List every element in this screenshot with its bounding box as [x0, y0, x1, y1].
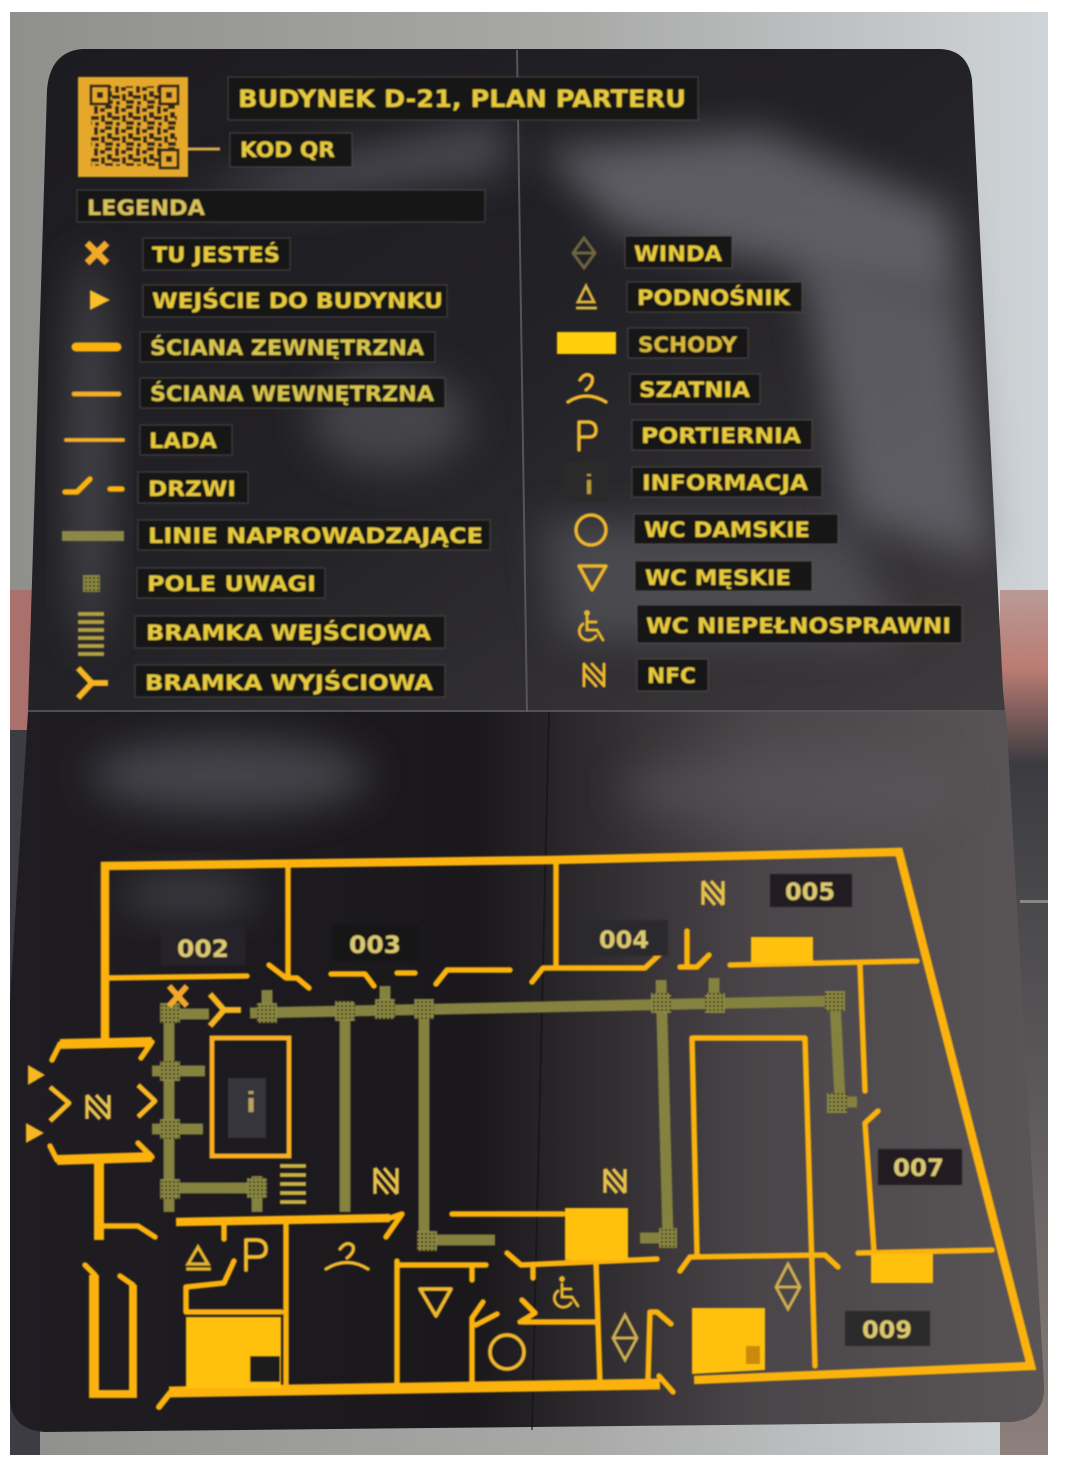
icon: building entrance — [90, 290, 110, 310]
room label 005 — [770, 874, 852, 907]
label: szatnia — [630, 374, 760, 404]
icon: porter's desk — [579, 422, 596, 450]
room label 003: 003 — [349, 931, 401, 959]
label: schody — [628, 328, 748, 358]
label: tu jesteś: TU JESTEŚ — [152, 242, 280, 267]
label: winda: WINDA — [634, 242, 723, 266]
label: informacja: INFORMACJA — [642, 471, 809, 495]
icon: stairs — [557, 332, 616, 354]
icon: men's toilet — [579, 566, 606, 590]
icon: attention field — [83, 575, 100, 592]
label: lada — [140, 425, 232, 455]
icon: wheelchair — [554, 1278, 578, 1307]
label: wc męskie: WC MĘSKIE — [645, 566, 791, 590]
icon: women's toilet — [576, 515, 606, 545]
label: wc niepełnosprawni — [637, 605, 962, 643]
QR leader line — [188, 148, 220, 150]
room label 003 — [333, 925, 419, 961]
icon: platform lift — [576, 286, 597, 308]
label: ściana wewnętrzna: ŚCIANA WEWNĘTRZNA — [150, 381, 435, 406]
room label 002: 002 — [177, 935, 229, 963]
legend heading — [77, 190, 485, 222]
label: linie naprowadzające — [138, 520, 490, 550]
stairs — [186, 937, 933, 1388]
room label 007: 007 — [893, 1154, 944, 1182]
label: wc męskie — [635, 561, 812, 591]
label: portiernia: PORTIERNIA — [641, 424, 802, 448]
label: pole uwagi — [137, 568, 325, 598]
icon: porter P — [246, 1240, 266, 1270]
QR code — [78, 77, 188, 177]
panel: legend right column — [557, 236, 962, 691]
QR label: KOD QR — [240, 138, 335, 162]
inner walls — [105, 860, 992, 1392]
room label 007 — [878, 1149, 962, 1185]
label: drzwi — [138, 472, 248, 503]
icon: exit gate — [78, 668, 108, 698]
room label 009 — [845, 1311, 930, 1346]
icon: accessible toilet — [579, 612, 603, 640]
icon: counter — [66, 438, 123, 442]
label: podnośnik: PODNOŚNIK — [637, 285, 791, 310]
room label 009: 009 — [862, 1316, 912, 1344]
label: nfc: NFC — [647, 664, 696, 688]
room label 002 — [161, 927, 245, 965]
icon: elevators — [613, 1264, 800, 1360]
plate: upper legend section — [28, 49, 1005, 712]
icon: men's toilet — [420, 1289, 451, 1316]
icon: outer wall — [76, 342, 117, 352]
outer walls — [105, 852, 1031, 1380]
label: winda — [625, 236, 732, 268]
floor plan — [26, 852, 1031, 1407]
QR label — [230, 133, 352, 167]
panel: legend left column — [62, 238, 490, 698]
label: wc niepełnosprawni: WC NIEPEŁNOSPRAWNI — [646, 614, 951, 638]
entrance arrows — [26, 1065, 155, 1143]
icon: inner wall — [74, 392, 119, 396]
icon: nfc — [584, 664, 604, 686]
exit gate — [210, 994, 241, 1026]
label: wejście: WEJŚCIE DO BUDYNKU — [152, 288, 443, 313]
icon: guide lines — [62, 531, 124, 541]
label: wc damskie — [634, 514, 838, 544]
guide lines — [152, 978, 857, 1251]
attention fields — [160, 991, 847, 1251]
icon: elevator — [573, 238, 595, 268]
legend heading: LEGENDA — [87, 196, 206, 220]
icon: cloakroom — [568, 375, 606, 402]
label: bramka wejściowa: BRAMKA WEJŚCIOWA — [146, 620, 432, 645]
you are here marker — [169, 986, 187, 1006]
icon: door — [65, 479, 122, 492]
label: schody: SCHODY — [638, 333, 738, 357]
label: linie naprowadzające: LINIE NAPROWADZAJĄCE — [148, 524, 483, 548]
title — [228, 77, 698, 120]
room label 004 — [578, 920, 668, 956]
icon: you are here — [87, 243, 107, 263]
label: informacja — [632, 467, 822, 497]
label: bramka wejściowa — [135, 616, 445, 648]
title: BUDYNEK D-21, PLAN PARTERU — [238, 85, 686, 113]
room label 005: 005 — [785, 878, 835, 906]
room label 004: 004 — [599, 926, 649, 954]
label: szatnia: SZATNIA — [639, 378, 751, 402]
label: ściana zewnętrzna: ŚCIANA ZEWNĘTRZNA — [150, 335, 425, 360]
label: tu jesteś — [143, 238, 290, 270]
plate: lower map section — [10, 711, 1044, 1432]
label: podnośnik — [627, 282, 802, 312]
information room — [212, 1038, 289, 1156]
icon: lift — [186, 1247, 211, 1269]
label: bramka wyjściowa: BRAMKA WYJŚCIOWA — [145, 670, 434, 695]
label: bramka wyjściowa — [135, 665, 445, 697]
label: wejście — [143, 285, 447, 317]
icon: women's toilet — [490, 1335, 524, 1369]
label: nfc — [637, 659, 708, 691]
label: portiernia — [632, 420, 812, 450]
label: drzwi: DRZWI — [148, 477, 236, 501]
label: lada: LADA — [149, 429, 218, 453]
label: wc damskie: WC DAMSKIE — [644, 518, 810, 542]
icon: nfc markers — [87, 881, 723, 1194]
icon: hanger — [326, 1244, 368, 1269]
label: pole uwagi: POLE UWAGI — [147, 572, 316, 596]
icon: information — [565, 462, 609, 502]
icon: entry gate — [78, 614, 104, 654]
entry gate — [280, 1166, 306, 1202]
